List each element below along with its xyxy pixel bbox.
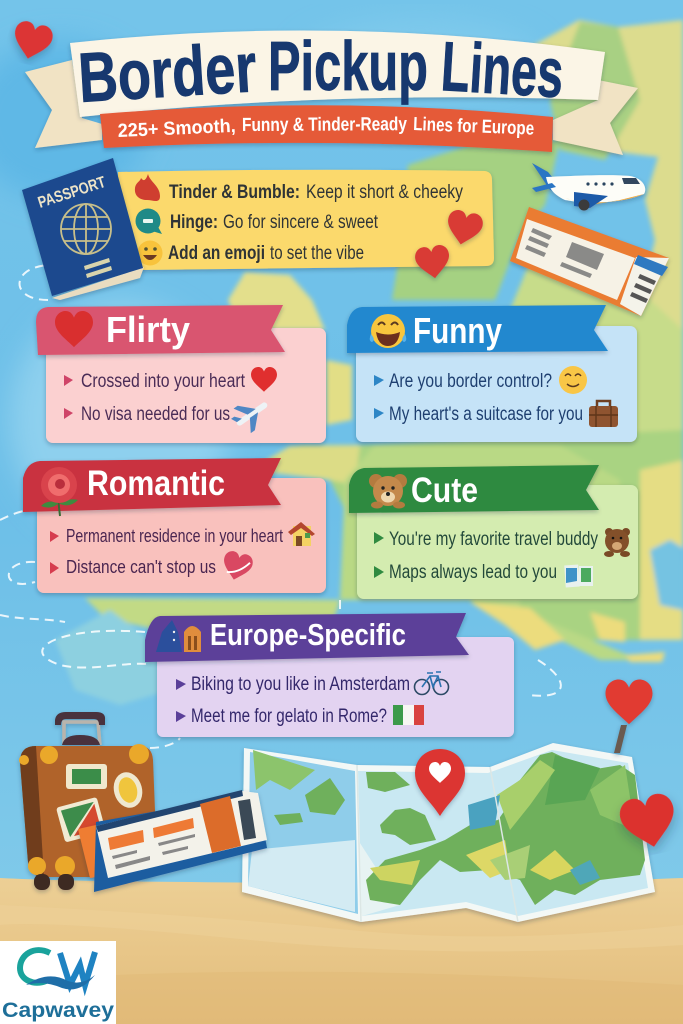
tips text: Go for sincere & sweet	[223, 212, 379, 233]
icon: italian flag	[393, 705, 424, 725]
heading: Cute	[411, 471, 478, 510]
list: You're my favorite travel buddy	[389, 529, 598, 550]
heading ribbon	[349, 465, 599, 513]
panel: romantic	[23, 458, 326, 593]
title text: Lines	[439, 27, 566, 112]
heading ribbon	[145, 613, 469, 662]
subtitle text	[117, 114, 535, 142]
icon: map pin	[415, 749, 465, 816]
icon: briefcase	[589, 401, 618, 427]
panel: funny	[347, 305, 637, 442]
list: No visa needed for us	[81, 404, 230, 425]
icon: heart	[55, 311, 93, 347]
icon: large red heart	[617, 791, 680, 852]
list: Maps always lead to you	[389, 562, 557, 583]
icon: house	[288, 522, 315, 546]
folded europe map	[242, 743, 655, 922]
map land masses	[253, 750, 645, 905]
icon: passport	[22, 158, 144, 300]
icon: brown bear	[604, 528, 630, 557]
sand ground	[0, 878, 683, 1024]
title text: Border	[76, 28, 259, 117]
list	[50, 522, 315, 583]
heading ribbon	[36, 305, 285, 355]
subtitle text: Funny & Tinder-Ready	[242, 114, 407, 136]
icon: laughing emoji	[370, 314, 406, 348]
title text	[76, 27, 566, 117]
logo: Capwavey	[0, 941, 116, 1024]
icon: boarding ticket right	[510, 207, 669, 316]
list: Distance can't stop us	[66, 557, 216, 577]
list: My heart's a suitcase for you	[389, 404, 583, 425]
panel: cute	[349, 465, 638, 599]
card	[157, 637, 514, 737]
icon: distance heart	[220, 549, 255, 583]
tips text: to set the vibe	[270, 243, 364, 264]
icon: airplane emoji	[227, 391, 275, 438]
tips text: Keep it short & cheeky	[306, 182, 463, 203]
icon: airplane	[532, 163, 645, 210]
icon: bicycle	[414, 672, 448, 694]
heading: Funny	[413, 310, 502, 351]
list: Biking to you like in Amsterdam	[191, 674, 410, 695]
title banner	[25, 27, 638, 155]
title text: Pickup	[268, 27, 428, 105]
icon: panel hearts	[414, 208, 485, 281]
tips text: Tinder & Bumble:	[169, 182, 300, 203]
heading: Europe-Specific	[210, 617, 406, 652]
panel: europe-specific	[145, 613, 514, 737]
icon: boarding passes	[78, 790, 267, 892]
heading ribbon	[347, 305, 608, 353]
subtitle ribbon	[100, 105, 553, 152]
icon: passport: PASSPORT	[36, 174, 108, 212]
icon: teddy bear	[369, 474, 407, 508]
panel: app tips	[118, 170, 494, 281]
card	[356, 326, 637, 442]
list	[374, 528, 630, 587]
icon: smile emoji	[138, 240, 162, 266]
cream banner	[70, 30, 605, 117]
card	[37, 478, 326, 593]
tips text: Hinge:	[170, 212, 218, 233]
list: Crossed into your heart	[81, 371, 246, 392]
icon: hinge bubble	[136, 208, 162, 234]
icon: top-left heart	[9, 19, 55, 63]
tips text: Add an emoji	[168, 243, 265, 264]
subtitle text: Lines for Europe	[413, 114, 535, 140]
icon: rose	[41, 467, 78, 516]
right ribbon tail	[553, 80, 638, 155]
card	[46, 328, 326, 443]
list	[176, 672, 448, 727]
logo wordmark: Capwavey	[2, 999, 114, 1022]
list: Permanent residence in your heart	[66, 526, 283, 546]
card	[357, 485, 638, 599]
list: Meet me for gelato in Rome?	[191, 706, 387, 727]
icon: smiling emoji	[559, 366, 587, 394]
tips text	[168, 182, 463, 264]
icon: suitcase	[19, 712, 157, 890]
list	[64, 367, 277, 438]
icon: heart on stick	[606, 680, 652, 753]
icon: flame	[135, 174, 160, 201]
list: Are you border control?	[389, 371, 552, 392]
left ribbon tail	[25, 60, 102, 148]
icon: maps	[564, 565, 593, 587]
heading: Romantic	[87, 464, 225, 503]
logo mark	[20, 950, 95, 989]
icon: landmarks	[156, 620, 201, 652]
heading: Flirty	[106, 309, 190, 350]
panel: flirty	[36, 305, 326, 443]
list	[374, 366, 618, 427]
subtitle text: 225+ Smooth,	[117, 116, 236, 142]
heading ribbon	[23, 458, 281, 512]
